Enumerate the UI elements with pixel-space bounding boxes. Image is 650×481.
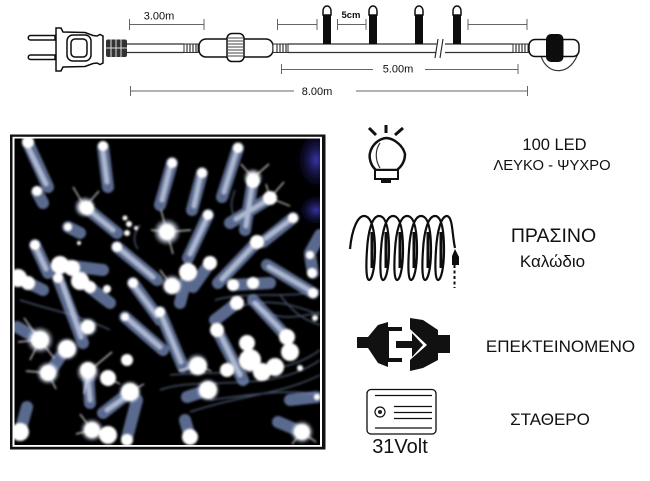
dimension: 8.00m: 8.00m	[302, 86, 332, 98]
icon: coiled green cable	[350, 216, 459, 288]
LED bulbs on cable	[323, 6, 461, 44]
dimension: 5cm: 5cm	[341, 10, 361, 21]
icon: 31V transformer label	[367, 390, 436, 434]
label: 100 LED: 100 LED	[522, 136, 587, 154]
dimension: 8.00m	[130, 86, 528, 98]
icon: extendable connector	[357, 318, 450, 371]
icon: LED bulb	[369, 125, 405, 183]
label: cable: Καλώδιο	[520, 252, 585, 271]
photo of LED string lights	[9, 130, 336, 450]
end connector	[513, 34, 579, 71]
label: fixed: ΣΤΑΘΕΡΟ	[510, 410, 590, 429]
label: 31Volt: 31Volt	[372, 436, 428, 458]
dimension: 5.00m: 5.00m	[383, 64, 413, 76]
dimension: 3.00m	[130, 10, 204, 30]
label: cold white: ΛΕΥΚΟ - ΨΥΧΡΟ	[493, 158, 611, 174]
dimension: 3.00m: 3.00m	[144, 10, 174, 22]
plug	[28, 28, 127, 71]
cable with inline connector	[127, 34, 513, 62]
label: green: ΠΡΑΣΙΝΟ	[511, 225, 596, 247]
label: extendable: ΕΠΕΚΤΕΙΝΟΜΕΝΟ	[486, 337, 635, 356]
cable dimension diagram	[28, 6, 579, 98]
dimension: LED spacing	[278, 19, 527, 30]
dimension: 5.00m	[282, 64, 518, 76]
dimension: 5cm	[338, 10, 366, 30]
